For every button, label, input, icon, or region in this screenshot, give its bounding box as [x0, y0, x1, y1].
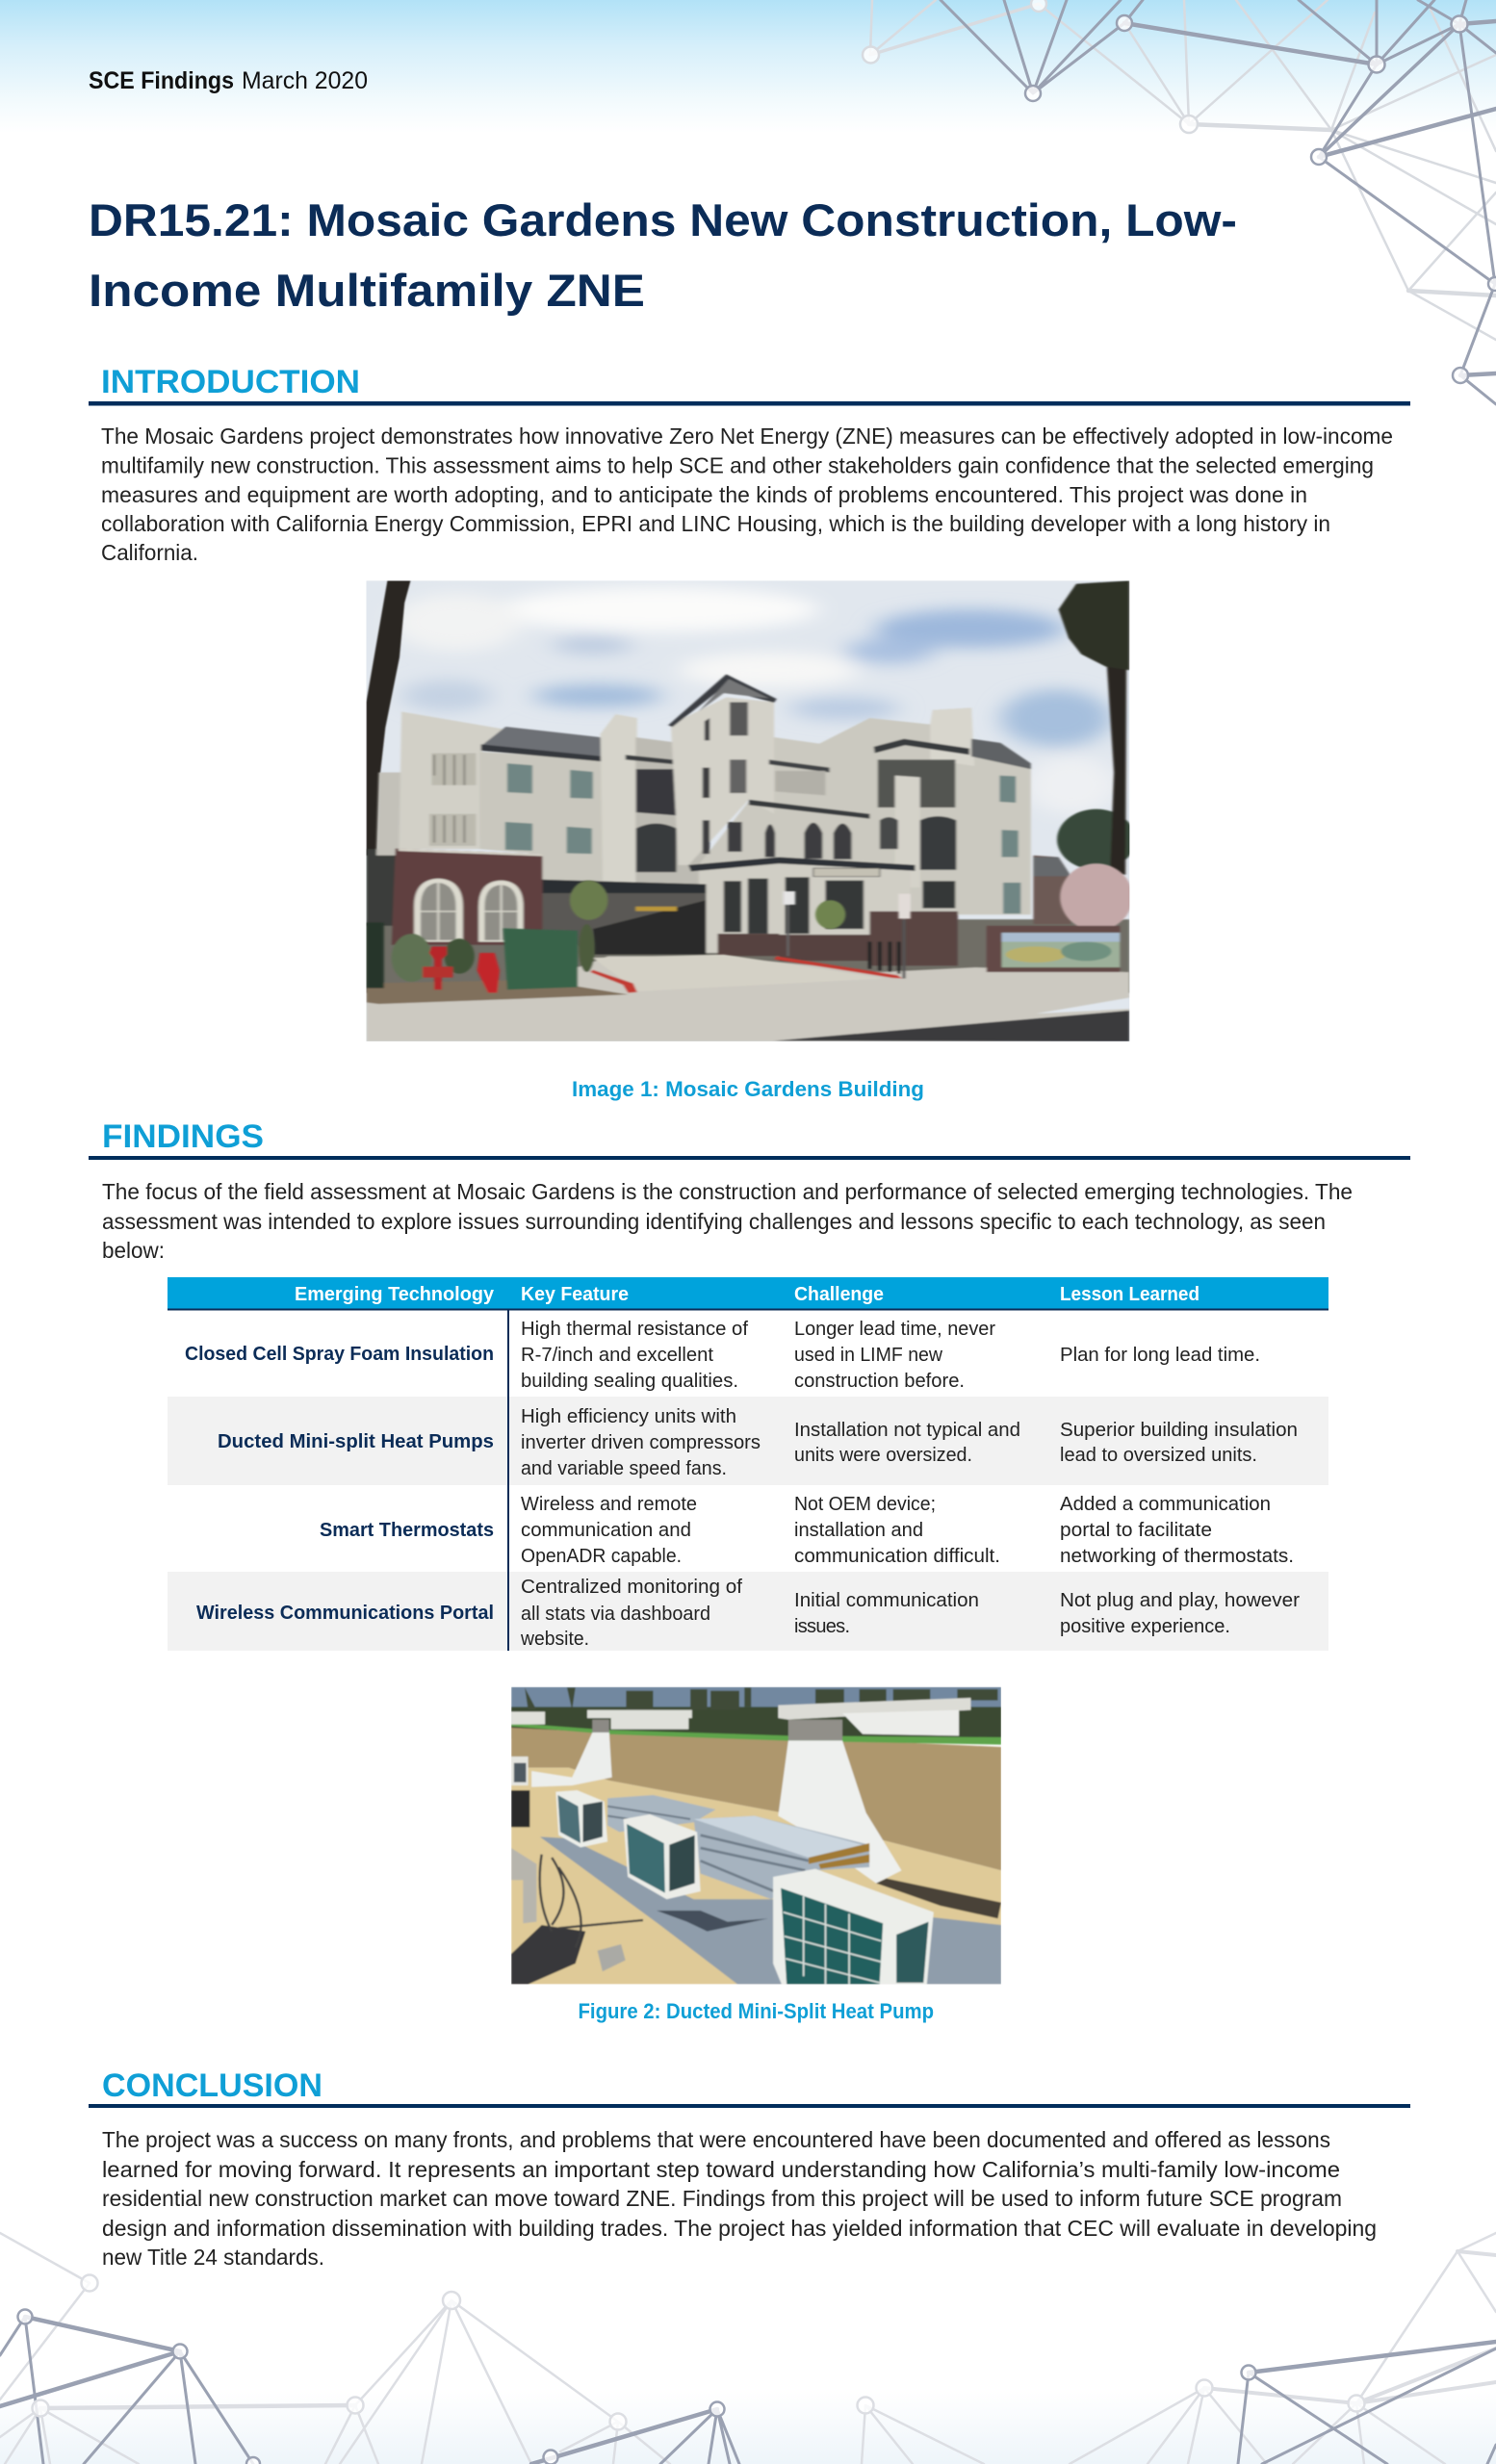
row: smart thermostats: Smart Thermostats: [320, 1520, 494, 1541]
introduction text: [101, 424, 1393, 565]
windows: [505, 763, 1020, 913]
conclusion text: design and information dissemination with building trades. The project has yielded information that CEC will evaluate in developing: [102, 2216, 1377, 2241]
row: wireless communications portal: website.: [520, 1629, 589, 1650]
cables and boxes: [511, 1925, 585, 1985]
row: closed cell spray foam: R-7/inch and excellent: [521, 1345, 713, 1366]
row: ducted mini-split: Ducted Mini-split Heat Pumps: [218, 1431, 494, 1452]
photo: ducted mini-split heat pump: [511, 1687, 1001, 1985]
heading: introduction: INTRODUCTION: [101, 364, 360, 400]
row: smart thermostats: [320, 1494, 1294, 1567]
recess: [635, 737, 709, 887]
header gradient background: [0, 0, 1496, 133]
conclusion text: learned for moving forward. It represents an important step toward understanding how California’s multi-family low-income: [102, 2157, 1340, 2182]
network graphic: top right: [863, 0, 1496, 404]
sky and trees: [511, 1686, 1001, 1707]
heading: conclusion: [89, 2067, 1410, 2108]
row: wireless communications portal: issues.: [794, 1616, 850, 1637]
palm tree left: [366, 580, 410, 856]
signs and rail: [902, 919, 906, 979]
unit 3: [773, 1869, 934, 1985]
row: ducted mini-split: and variable speed fans.: [521, 1458, 727, 1479]
column: [601, 714, 637, 887]
row: smart thermostats: portal to facilitate: [1060, 1520, 1212, 1541]
unit 2: [624, 1814, 701, 1899]
heading: findings: [89, 1118, 1410, 1160]
table header: Key Feature: [521, 1284, 629, 1305]
far-left backdrop: [366, 849, 401, 926]
row: closed cell spray foam: used in LIMF new: [794, 1345, 943, 1366]
table header: Emerging Technology: [295, 1284, 495, 1305]
introduction text: The Mosaic Gardens project demonstrates how innovative Zero Net Energy (ZNE) measures can be effectively adopted in low-income: [101, 424, 1393, 449]
row: wireless communications portal: [196, 1577, 1300, 1650]
center and right block: [699, 707, 1031, 914]
small unit far left: [511, 1757, 529, 1785]
blue-grey pad: [540, 1836, 1001, 1985]
row: smart thermostats: OpenADR capable.: [521, 1546, 682, 1567]
unit 1: [555, 1790, 607, 1847]
table: emerging technologies: [168, 1277, 1328, 1651]
roof deck: [511, 1768, 1001, 1985]
foreground ground: [366, 863, 1132, 1041]
row: ducted mini-split: Installation not typical and: [794, 1420, 1020, 1441]
metal duct stacks: [607, 1795, 715, 1832]
trees far right: [1057, 580, 1136, 875]
row: ducted mini-split: High efficiency units with: [521, 1406, 736, 1427]
introduction text: measures and equipment are worth adopting, and to anticipate the kinds of problems encountered. This project was done in: [101, 482, 1307, 507]
wall: left block: [399, 711, 504, 849]
mural wall: [987, 926, 1120, 972]
row: ducted mini-split: [218, 1406, 1298, 1479]
network graphic: bottom: [0, 2233, 1496, 2464]
introduction text: multifamily new construction. This assessment aims to help SCE and other stakeholders gain confidence that the selected emerging: [101, 452, 1374, 477]
caption: figure 2: Figure 2: Ducted Mini-Split Heat Pump: [578, 1999, 934, 2023]
shrubs: [392, 934, 431, 982]
sky: [366, 580, 1129, 1041]
table header: Lesson Learned: [1060, 1284, 1199, 1305]
garage: [541, 891, 708, 943]
row: closed cell spray foam: Plan for long lead time.: [1060, 1345, 1260, 1366]
caption: image 1: Image 1: Mosaic Gardens Building: [572, 1077, 924, 1101]
row: smart thermostats: Wireless and remote: [521, 1494, 697, 1515]
entrance block: [704, 914, 872, 954]
row: smart thermostats: communication difficult.: [794, 1546, 1000, 1567]
table header: [168, 1277, 1328, 1311]
header line: SCE Findings March 2020: March 2020: [242, 67, 368, 94]
cap right: [778, 1698, 970, 1720]
title: DR15.21: Mosaic Gardens New Construction, Low-: [89, 194, 1237, 245]
row: ducted mini-split: inverter driven compressors: [521, 1432, 761, 1453]
plastic wrap: [778, 1740, 901, 1884]
row: smart thermostats: installation and: [794, 1520, 923, 1541]
row: smart thermostats: Added a communication: [1060, 1494, 1271, 1515]
row: smart thermostats: networking of thermostats.: [1060, 1546, 1294, 1567]
findings text: The focus of the field assessment at Mosaic Gardens is the construction and performance of selected emerging technologies. The: [102, 1179, 1353, 1204]
row: wireless communications portal: Wireless Communications Portal: [196, 1603, 494, 1624]
brick block: [392, 848, 543, 945]
hydrants and sign: [429, 946, 447, 989]
footer gradient background: [0, 2392, 1496, 2464]
rolled dark mat: [876, 1879, 1001, 1918]
tower: [671, 697, 774, 865]
conclusion text: [102, 2127, 1377, 2270]
row: closed cell spray foam: construction before.: [794, 1371, 965, 1392]
introduction text: California.: [101, 540, 198, 565]
table header: Challenge: [794, 1284, 884, 1305]
backdrop behind lower storey: [366, 919, 1129, 993]
conclusion text: residential new construction market can move toward ZNE. Findings from this project will be used to inform future SCE program: [102, 2186, 1342, 2211]
row: wireless communications portal: all stats via dashboard: [521, 1604, 710, 1625]
conclusion text: The project was a success on many fronts, and problems that were encountered have been documented and offered as lessons: [102, 2127, 1330, 2152]
row: closed cell spray foam: High thermal resistance of: [521, 1319, 748, 1340]
row: closed cell spray foam: [185, 1319, 1260, 1392]
row: smart thermostats: Not OEM device;: [794, 1494, 936, 1515]
row: wireless communications portal: Not plug and play, however: [1060, 1590, 1300, 1611]
roof: left: [482, 727, 603, 759]
row: smart thermostats: communication and: [521, 1520, 691, 1541]
row: wireless communications portal: Initial communication: [794, 1590, 979, 1611]
heading: introduction: [89, 364, 1410, 406]
title: Income Multifamily ZNE: [89, 265, 645, 316]
header line: SCE Findings March 2020: SCE Findings: [89, 67, 234, 94]
parapet wall: [511, 1728, 1001, 1870]
row: ducted mini-split: lead to oversized units.: [1060, 1445, 1257, 1466]
row: closed cell spray foam: building sealing qualities.: [521, 1371, 738, 1392]
row: closed cell spray foam: Closed Cell Spray Foam Insulation: [185, 1344, 494, 1365]
cap left: [511, 1710, 692, 1730]
row: closed cell spray foam: Longer lead time, never: [794, 1319, 995, 1340]
findings text: [102, 1179, 1353, 1263]
title: [89, 194, 1237, 316]
row: ducted mini-split: units were oversized.: [794, 1445, 972, 1466]
findings text: assessment was intended to explore issues surrounding identifying challenges and lessons specific to each technology, as seen: [102, 1209, 1326, 1234]
row: wireless communications portal: positive experience.: [1060, 1616, 1230, 1637]
heading: findings: FINDINGS: [102, 1118, 264, 1155]
findings text: below:: [102, 1238, 165, 1263]
heading: conclusion: CONCLUSION: [102, 2067, 322, 2104]
row: wireless communications portal: Centralized monitoring of: [521, 1577, 742, 1598]
header line: SCE Findings March 2020: [89, 67, 368, 94]
photo: Mosaic Gardens building: [366, 580, 1136, 1041]
conclusion text: new Title 24 standards.: [102, 2245, 324, 2270]
building: [366, 675, 1129, 993]
introduction text: collaboration with California Energy Commission, EPRI and LINC Housing, which is the building developer with a long history in: [101, 511, 1330, 536]
green utility box: [503, 928, 578, 989]
row backgrounds: [168, 1397, 1328, 1651]
row: ducted mini-split: Superior building insulation: [1060, 1420, 1298, 1441]
right low block: [1033, 856, 1071, 924]
